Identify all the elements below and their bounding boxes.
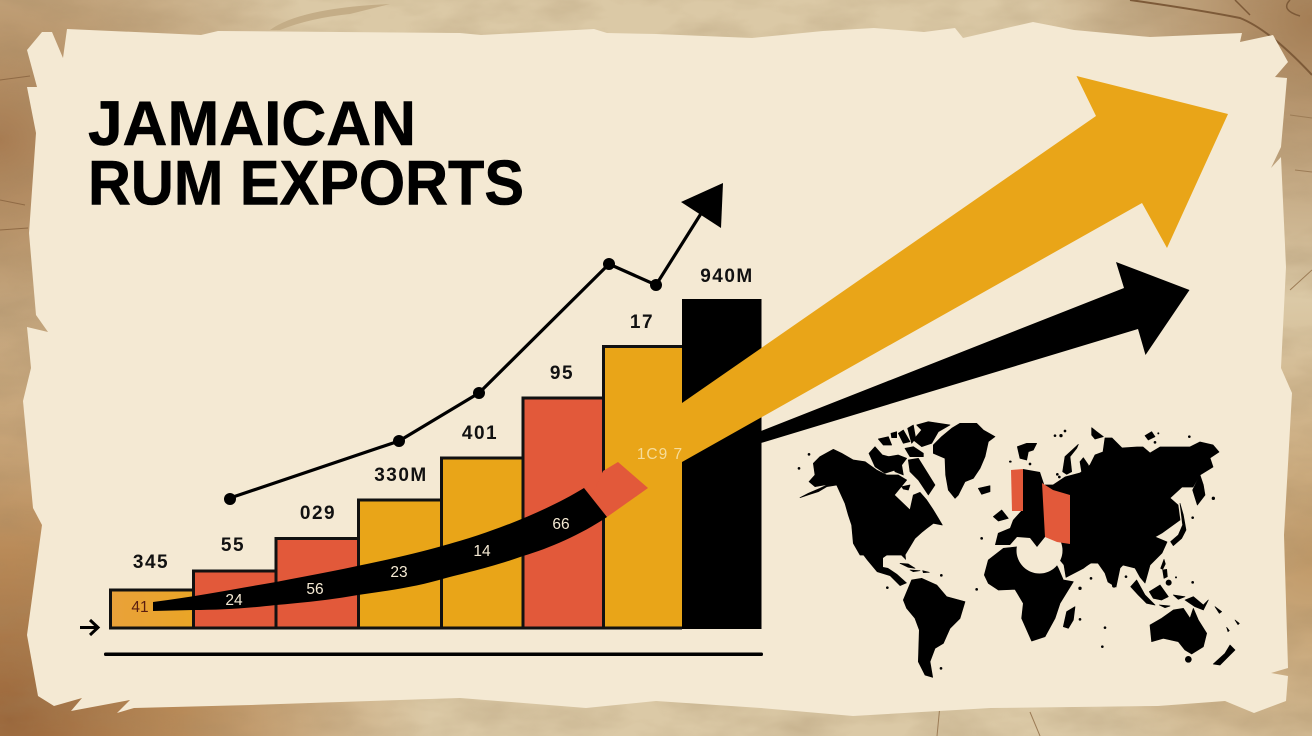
- bar value labels: 330M: [374, 465, 428, 486]
- bar 2: [194, 571, 276, 628]
- ribbon value labels: 23: [390, 564, 408, 581]
- southern North America: [858, 548, 907, 586]
- bar 7: [604, 346, 682, 628]
- South America and Africa: [886, 540, 1110, 677]
- Asia mainland: [1045, 438, 1219, 587]
- Southeast Asia and Oceania: [1101, 559, 1239, 665]
- bar value labels: 95: [550, 363, 574, 384]
- curved black ribbon arrow: [153, 462, 648, 611]
- bar value labels: 17: [630, 312, 654, 333]
- red highlight right: [1042, 483, 1070, 544]
- ribbon value labels: 1C9 7: [637, 446, 683, 463]
- bar value labels: 55: [221, 535, 245, 556]
- North America and Arctic: [798, 422, 1011, 555]
- Europe: [995, 469, 1046, 547]
- bar 7 outline: [604, 346, 682, 628]
- bar chart: [110, 299, 762, 629]
- Asia islands and Arctic: [1010, 428, 1215, 546]
- large yellow growth arrow: [682, 76, 1228, 462]
- bar 1: [110, 590, 194, 628]
- black export arrow: [761, 262, 1190, 443]
- ribbon value labels: [131, 446, 683, 616]
- red highlight left: [1011, 469, 1023, 511]
- bar value labels: 029: [300, 503, 336, 524]
- ribbon value labels: 24: [225, 592, 243, 609]
- title: RUM EXPORTS: [88, 148, 524, 218]
- ribbon value labels: 41: [131, 599, 149, 616]
- bar 8: [682, 299, 762, 629]
- ribbon value labels: 66: [552, 516, 570, 533]
- bar value labels: [133, 266, 754, 573]
- world map: [798, 422, 1239, 677]
- title: [88, 89, 524, 218]
- baseline axis: [104, 652, 763, 656]
- bar value labels: 940M: [700, 266, 754, 287]
- bar 5: [442, 458, 523, 628]
- ribbon value labels: 14: [473, 543, 491, 560]
- bar value labels: 401: [462, 423, 498, 444]
- bar value labels: 345: [133, 552, 169, 573]
- bar 3: [276, 538, 358, 628]
- bar 6: [523, 398, 604, 628]
- cream circle cut-out: [1016, 528, 1062, 574]
- bar 4: [358, 500, 442, 628]
- ribbon value labels: 56: [306, 581, 324, 598]
- line chart with arrow: [224, 183, 723, 505]
- title: JAMAICAN: [88, 89, 416, 159]
- small axis arrow: [80, 620, 98, 635]
